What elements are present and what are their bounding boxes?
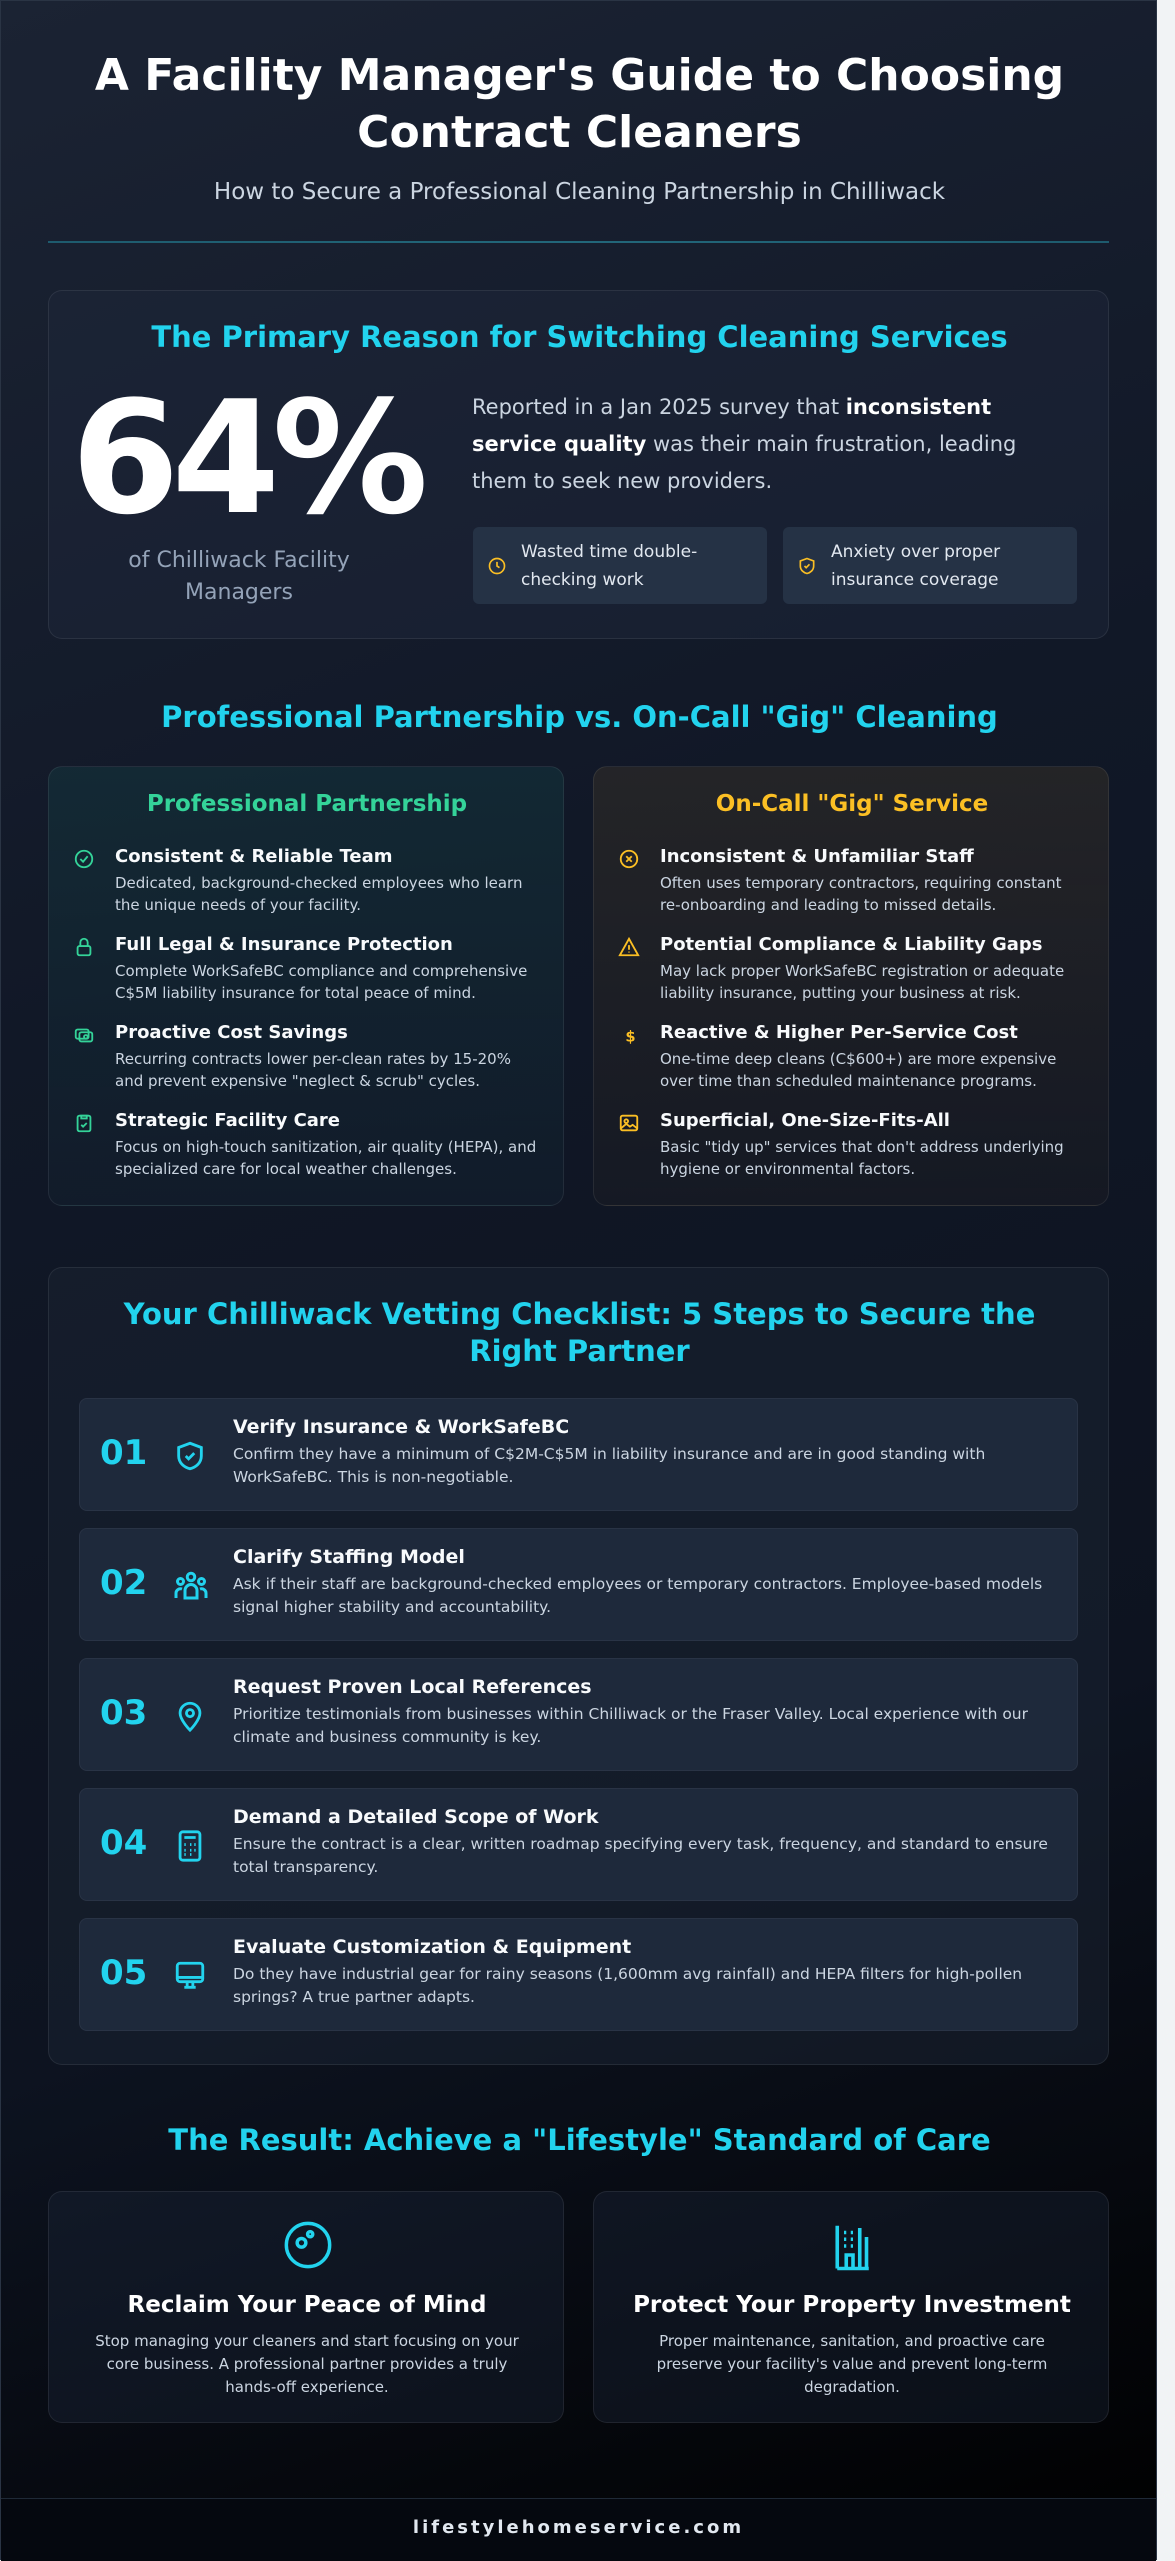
step 05: [79, 1918, 1078, 2031]
stat caption: of Chilliwack Facility Managers: [128, 548, 350, 605]
item: higher cost: One-time deep cleans (C$600+) are more expensive over time than scheduled maintenance programs.: [660, 1050, 1056, 1090]
heading: checklist: Your Chilliwack Vetting Checklist: 5 Steps to Secure the: [124, 1297, 1035, 1331]
item: superficial: [620, 1110, 1064, 1178]
heading: checklist: [123, 1297, 1035, 1368]
step 05: 05: [100, 1953, 147, 1993]
heading: result: The Result: Achieve a "Lifestyle" Standard of Care: [168, 2123, 991, 2157]
step 03: Prioritize testimonials from businesses within Chilliwack or the Fraser Valley. Local experience with our climate and business community is key.: [233, 1705, 1028, 1746]
panel: professional partnership: [48, 766, 564, 1206]
item: consistent team: Consistent & Reliable Team: [115, 846, 393, 867]
step 04: 04: [100, 1823, 147, 1863]
callout: anxiety: Anxiety over proper insurance coverage: [831, 542, 1000, 590]
step 02: [79, 1528, 1078, 1641]
item: compliance gaps: [618, 934, 1064, 1002]
item: superficial: Superficial, One-Size-Fits-All: [660, 1110, 950, 1131]
callout: wasted time: [473, 527, 767, 604]
step 02: Ask if their staff are background-checked employees or temporary contractors. Employee-based models signal higher stability and accountability.: [233, 1575, 1042, 1616]
item: consistent team: [74, 846, 522, 914]
callout: wasted time: Wasted time double-checking work: [521, 542, 697, 590]
heading: checklist: Right Partner: [469, 1334, 690, 1368]
icon: building: [835, 2226, 869, 2270]
item: higher cost: $: [625, 1028, 636, 1045]
title: Contract Cleaners: [357, 107, 802, 158]
item: cost savings: Proactive Cost Savings: [115, 1022, 348, 1043]
step 01: Verify Insurance & WorkSafeBC: [233, 1416, 569, 1438]
desc: Proper maintenance, sanitation, and proactive care preserve your facility's value and prevent long-term degradation.: [657, 2332, 1047, 2396]
item: legal protection: Full Legal & Insurance Protection: [115, 934, 453, 955]
item: legal protection: Complete WorkSafeBC compliance and comprehensive C$5M liability insurance for total peace of mind.: [115, 962, 527, 1002]
subtitle: How to Secure a Professional Cleaning Partnership in Chilliwack: [214, 179, 945, 205]
item: inconsistent staff: [620, 846, 1062, 914]
step 04: Ensure the contract is a clear, written roadmap specifying every task, frequency, and standard to ensure total transparency.: [233, 1835, 1048, 1876]
step 02: Clarify Staffing Model: [233, 1546, 465, 1568]
heading: primary reason: The Primary Reason for Switching Cleaning Services: [151, 320, 1008, 354]
step 02: 02: [100, 1563, 147, 1603]
item: consistent team: Dedicated, background-checked employees who learn the unique needs of your facility.: [115, 874, 522, 914]
step 03: [79, 1658, 1078, 1771]
heading: comparison: Professional Partnership vs. On-Call "Gig" Cleaning: [161, 700, 998, 734]
footer: lifestylehomeservice.com: [413, 2517, 744, 2538]
step 03: 03: [100, 1693, 147, 1733]
footer: [1, 2498, 1156, 2561]
title: A Facility Manager's Guide to Choosing: [95, 50, 1064, 101]
survey text: Reported in a Jan 2025 survey that inconsistent service quality was their main frustration, leading them to seek new providers.: [472, 395, 1016, 493]
panel: peace of mind: [48, 2191, 564, 2423]
item: legal protection: [76, 934, 527, 1002]
item: strategic care: [76, 1110, 536, 1178]
item: cost savings: [74, 1022, 511, 1090]
panel: vetting checklist: [48, 1267, 1109, 2065]
item: cost savings: Recurring contracts lower per-clean rates by 15-20% and prevent expensive "neglect & scrub" cycles.: [115, 1050, 511, 1090]
item: inconsistent staff: Often uses temporary contractors, requiring constant re-onboarding and leading to missed details.: [660, 874, 1062, 914]
step 01: [79, 1398, 1078, 1511]
step 04: [79, 1788, 1078, 1901]
item: higher cost: [625, 1022, 1056, 1090]
item: strategic care: Focus on high-touch sanitization, air quality (HEPA), and specialized care for local weather challenges.: [115, 1138, 536, 1178]
title: Reclaim Your Peace of Mind: [128, 2292, 486, 2318]
item: compliance gaps: Potential Compliance & Liability Gaps: [660, 934, 1042, 955]
big stat 64%: 64%: [71, 367, 420, 549]
item: strategic care: Strategic Facility Care: [115, 1110, 340, 1131]
panel: gig service: [593, 766, 1109, 1206]
step 05: Evaluate Customization & Equipment: [233, 1936, 631, 1958]
panel: primary reason: [48, 290, 1109, 639]
callout: anxiety: [783, 527, 1077, 604]
step 01: Confirm they have a minimum of C$2M-C$5M in liability insurance and are in good standing with WorkSafeBC. This is non-negotiable.: [233, 1445, 985, 1486]
title: [95, 50, 1064, 158]
step 03: Request Proven Local References: [233, 1676, 592, 1698]
item: inconsistent staff: Inconsistent & Unfamiliar Staff: [660, 846, 974, 867]
step 05: Do they have industrial gear for rainy seasons (1,600mm avg rainfall) and HEPA filters for high-pollen springs? A true partner adapts.: [233, 1965, 1022, 2006]
icon: peace: [284, 2222, 332, 2268]
step 01: 01: [100, 1433, 147, 1473]
title: Protect Your Property Investment: [633, 2292, 1071, 2318]
item: compliance gaps: May lack proper WorkSafeBC registration or adequate liability insurance, putting your business at risk.: [660, 962, 1064, 1002]
panel: property investment: [593, 2191, 1109, 2423]
panel heading: On-Call "Gig" Service: [716, 791, 988, 817]
item: superficial: Basic "tidy up" services that don't address underlying hygiene or environmental factors.: [660, 1138, 1064, 1178]
desc: Stop managing your cleaners and start focusing on your core business. A professional partner provides a truly hands-off experience.: [95, 2332, 519, 2396]
step 04: Demand a Detailed Scope of Work: [233, 1806, 599, 1828]
item: higher cost: Reactive & Higher Per-Service Cost: [660, 1022, 1018, 1043]
panel heading: Professional Partnership: [147, 791, 467, 817]
